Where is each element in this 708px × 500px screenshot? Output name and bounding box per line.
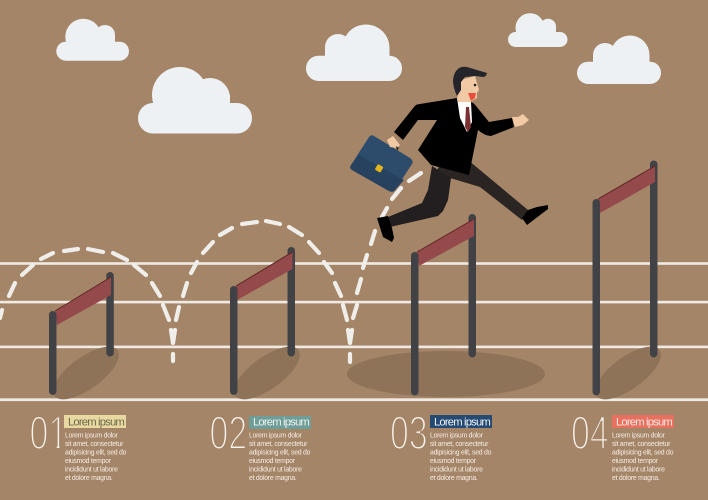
description 01: incididunt ut labore [65, 466, 118, 474]
description 02: incididunt ut labore [249, 466, 302, 474]
shirt [457, 98, 472, 132]
description 02: adipisicing elit, sed do [249, 450, 311, 456]
hurdle 1 [49, 272, 114, 395]
description 03: incididunt ut labore [430, 466, 483, 474]
cloud 1 [56, 19, 129, 61]
description 03: eiusmod tempor [430, 458, 477, 465]
step 03: Lorem ipsum [434, 416, 490, 428]
description 03: sit amet, consectetur [430, 441, 489, 448]
cloud 4 [508, 13, 568, 47]
step 04: Lorem ipsum [616, 416, 672, 428]
step 02 [210, 407, 311, 482]
cloud 5 [577, 36, 661, 84]
businessman jumping [350, 67, 548, 242]
step 04 [571, 407, 674, 482]
description 02: eiusmod tempor [249, 458, 296, 465]
label 02 [249, 416, 311, 429]
number 04: 04 [571, 407, 609, 459]
step 01: Lorem ipsum [68, 416, 124, 428]
number 01: 01 [30, 407, 67, 459]
description 02: Lorem ipsum dolor [249, 432, 303, 440]
step 02: Lorem ipsum [253, 416, 309, 428]
description 01: eiusmod tempor [65, 458, 112, 465]
hair [453, 67, 487, 96]
description 04: Lorem ipsum dolor [612, 432, 666, 440]
description 03: et dolore magna. [430, 475, 478, 482]
step 03 [390, 407, 492, 482]
label 04 [612, 415, 674, 428]
briefcase [350, 135, 413, 192]
description 03: Lorem ipsum dolor [430, 432, 484, 440]
description 02: sit amet, consectetur [249, 441, 308, 448]
front leg [388, 166, 451, 227]
tie [465, 107, 471, 132]
hurdle 2 [230, 247, 295, 395]
description 01: adipisicing elit, sed do [65, 450, 127, 456]
cloud 2 [138, 67, 252, 134]
description 02: et dolore magna. [249, 475, 297, 482]
description 01: sit amet, consectetur [65, 441, 124, 448]
left hand [387, 136, 400, 148]
hurdle shadows [45, 337, 669, 409]
description 04: incididunt ut labore [612, 466, 665, 474]
description 04: et dolore magna. [612, 475, 660, 482]
hurdle 3 [411, 214, 476, 396]
shoes [377, 205, 548, 242]
eye and mouth [474, 84, 476, 86]
hurdle 4 [592, 160, 658, 396]
description 04: sit amet, consectetur [612, 441, 671, 448]
description 01: et dolore magna. [65, 475, 113, 482]
right hand [512, 114, 529, 127]
step 01 [30, 407, 127, 482]
label 03 [430, 415, 492, 428]
description 04: adipisicing elit, sed do [612, 450, 674, 456]
bounce trajectory dashes [0, 173, 421, 362]
number 03: 03 [390, 407, 428, 459]
rear leg [436, 160, 528, 220]
description 01: Lorem ipsum dolor [65, 432, 119, 440]
description 03: adipisicing elit, sed do [430, 450, 492, 456]
jacket [394, 98, 514, 175]
head [457, 76, 479, 102]
description 04: eiusmod tempor [612, 458, 659, 465]
number 02: 02 [210, 407, 247, 459]
running track lines [0, 262, 708, 401]
cloud 3 [306, 24, 402, 81]
label 01 [64, 415, 126, 428]
